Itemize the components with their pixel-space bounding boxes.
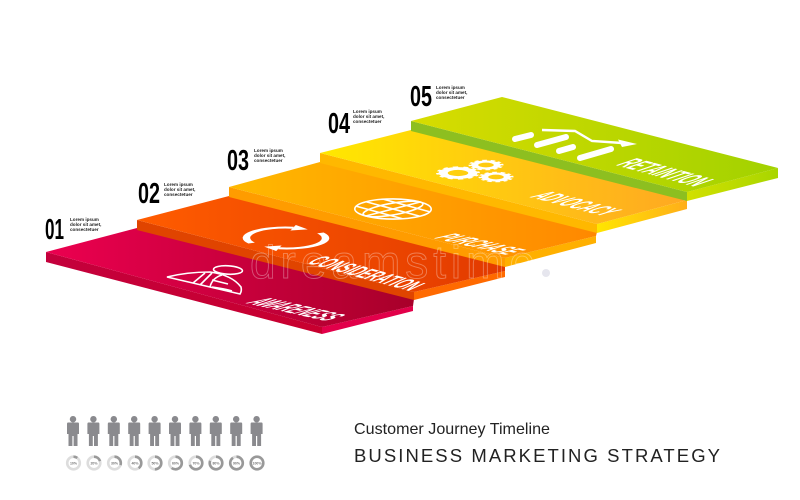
step 1 number and caption [45, 214, 101, 246]
progress rings row: 90% [233, 461, 241, 465]
icon: growth chart [515, 130, 637, 158]
panel: step 1 awareness [46, 228, 414, 334]
step 3 number and caption: 03 [227, 145, 249, 177]
step 4 number and caption [328, 108, 384, 140]
step 4 number and caption: 04 [328, 108, 350, 140]
step 1 number and caption: consectetuer [70, 227, 99, 232]
panel: step 3 purchase [229, 162, 597, 267]
label: purchase: PURCHASE [425, 232, 533, 257]
icon: globe [339, 195, 447, 223]
step 3 number and caption [227, 145, 285, 177]
step 4 number and caption: dolor sit amet, [353, 114, 384, 119]
step 1 number and caption: Lorem ipsum [70, 217, 99, 222]
progress rings row: 20% [90, 461, 98, 465]
progress rings row: 60% [172, 461, 180, 465]
step 2 number and caption: consectetuer [164, 192, 193, 197]
panel: step 4 advocacy [320, 130, 687, 233]
step 5 number and caption: Lorem ipsum [436, 85, 465, 90]
step 3 number and caption: Lorem ipsum [254, 148, 283, 153]
step 2 number and caption: dolor sit amet, [164, 187, 195, 192]
progress rings row: 10% [70, 461, 78, 465]
step 2 number and caption: Lorem ipsum [164, 182, 193, 187]
step 2 number and caption: 02 [138, 178, 160, 210]
watermark: dreamstime [250, 236, 535, 288]
step 4 number and caption: Lorem ipsum [353, 109, 382, 114]
step 5 number and caption: dolor sit amet, [436, 90, 467, 95]
progress rings row: 30% [111, 461, 119, 465]
panel: step 2 consideration [137, 196, 505, 300]
progress rings row [67, 457, 263, 469]
progress rings row: 80% [212, 461, 220, 465]
subtitle: Customer Journey Timeline [354, 421, 550, 438]
step 3 number and caption: dolor sit amet, [254, 153, 285, 158]
step 4 number and caption: consectetuer [353, 119, 382, 124]
step 2 number and caption [138, 178, 195, 210]
label: awareness: AWARENESS [237, 296, 354, 323]
title: BUSINESS MARKETING STRATEGY [354, 445, 720, 466]
icon: gears [430, 158, 518, 184]
step 5 number and caption: consectetuer [436, 95, 465, 100]
progress rings row: 70% [192, 461, 200, 465]
step 5 number and caption: 05 [410, 81, 432, 113]
progress rings row: 40% [131, 461, 139, 465]
step 1 number and caption: dolor sit amet, [70, 222, 101, 227]
step 3 number and caption: consectetuer [254, 158, 283, 163]
icon: person [167, 265, 243, 294]
panel: step 5 retention [411, 97, 778, 201]
step 5 number and caption [410, 81, 467, 113]
pictogram row: people [67, 416, 263, 446]
progress rings row: 50% [151, 461, 159, 465]
step 1 number and caption: 01 [45, 214, 64, 246]
icon: cycle arrows [229, 223, 343, 253]
label: advocacy: ADVOCACY [523, 189, 630, 218]
label: consideration: CONSIDERATION [300, 253, 431, 294]
label: retention: RETAINTION [607, 156, 721, 189]
progress rings row: 100% [253, 461, 262, 465]
